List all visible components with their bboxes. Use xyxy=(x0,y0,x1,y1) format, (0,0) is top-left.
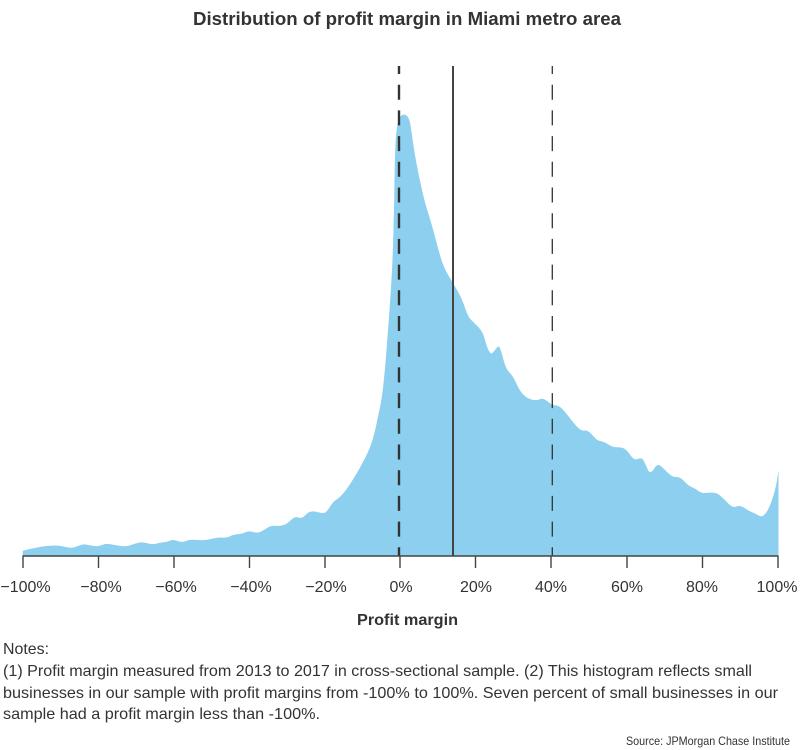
notes: businesses in our sample with profit margins from -100% to 100%. Seven percent of small businesses in our xyxy=(3,685,779,702)
chart: profit margin distribution xyxy=(0,66,797,596)
title: Distribution of profit margin in Miami metro area xyxy=(193,9,622,29)
x axis title: Profit margin xyxy=(357,612,458,629)
x axis tick labels: 20% xyxy=(460,579,492,596)
x axis with ticks xyxy=(22,556,778,568)
x axis tick labels xyxy=(0,579,797,596)
area: density histogram xyxy=(23,115,778,556)
x axis tick labels: 60% xyxy=(611,579,643,596)
notes: sample had a profit margin less than -100%. xyxy=(3,706,320,723)
reference line: solid median xyxy=(452,66,454,556)
x axis tick labels: −60% xyxy=(155,579,197,596)
x axis tick labels: −100% xyxy=(0,579,51,596)
x axis tick labels: −20% xyxy=(305,579,347,596)
x axis tick labels: 0% xyxy=(389,579,413,596)
notes xyxy=(3,641,779,723)
x axis tick labels: −80% xyxy=(80,579,122,596)
reference line: left dashed at 0% xyxy=(398,66,400,556)
reference line: right dashed at 40% xyxy=(551,66,553,556)
x axis tick labels: 100% xyxy=(757,579,797,596)
x axis tick labels: −40% xyxy=(230,579,272,596)
notes: (1) Profit margin measured from 2013 to 2017 in cross-sectional sample. (2) This histogram reflects small xyxy=(3,663,752,680)
notes: Notes: xyxy=(3,641,49,658)
x axis tick labels: 40% xyxy=(535,579,567,596)
x axis tick labels: 80% xyxy=(686,579,718,596)
